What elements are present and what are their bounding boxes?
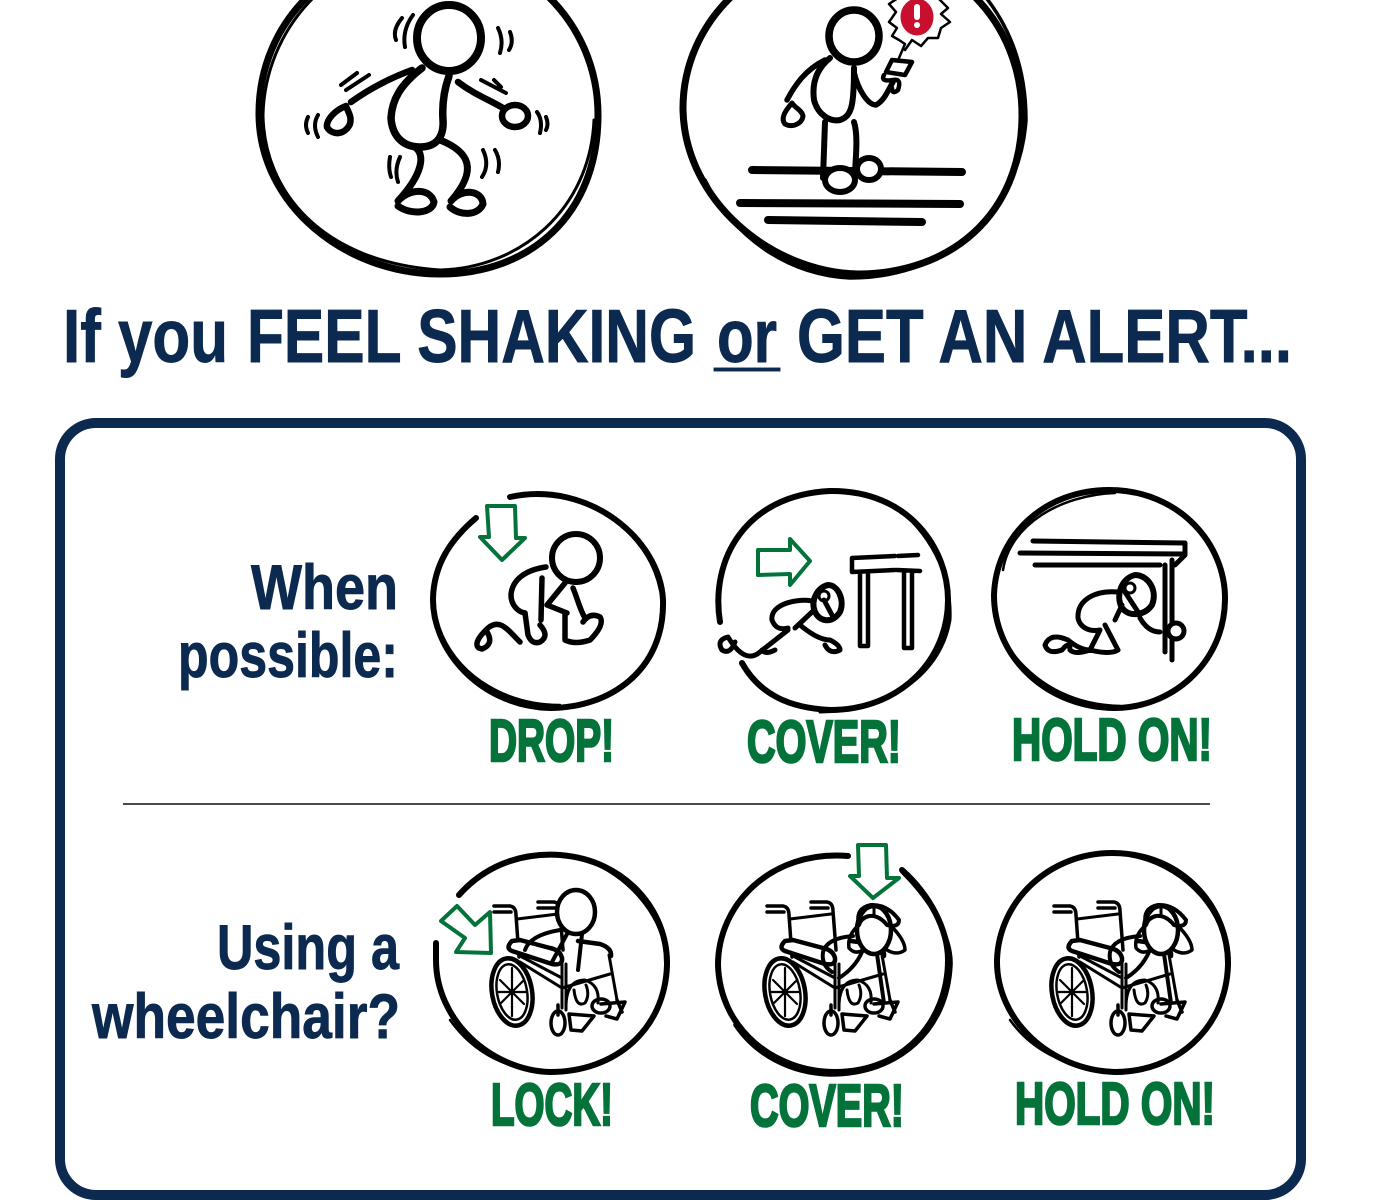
title: or	[717, 294, 777, 378]
motion lines	[306, 15, 548, 182]
label: hold on: HOLD ON!	[1015, 1071, 1215, 1137]
table leg	[1165, 560, 1172, 660]
table	[852, 555, 920, 648]
hands	[327, 106, 351, 133]
arrow diagonal	[441, 906, 491, 953]
wheelchair	[1046, 902, 1185, 1035]
icon: figure receiving phone alert in circle	[683, 0, 1026, 278]
circle outline	[683, 0, 1022, 274]
label: hold on: HOLD ON!	[1012, 707, 1212, 773]
hands and feet	[477, 613, 601, 649]
title: GET AN ALERT...	[797, 294, 1292, 378]
crouching figure	[1119, 575, 1154, 614]
arrow down	[850, 845, 899, 898]
circle outline	[997, 853, 1228, 1072]
heading: using a wheelchair: Using a	[217, 913, 400, 983]
seated figure	[525, 890, 595, 970]
circle outline	[259, 0, 598, 274]
body and limbs	[511, 567, 585, 620]
arms	[787, 60, 893, 105]
icon: hold on	[994, 490, 1225, 708]
icon: cover	[718, 491, 950, 712]
heading: when possible: possible:	[178, 621, 398, 691]
circle outline with gap	[436, 855, 667, 1072]
icon: drop	[433, 494, 663, 708]
head	[829, 10, 879, 62]
wheelchair	[486, 902, 625, 1035]
body	[391, 68, 449, 147]
icon: lock	[436, 855, 667, 1072]
label: cover: COVER!	[750, 1073, 904, 1139]
table	[1020, 541, 1185, 565]
label: drop: DROP!	[489, 708, 614, 774]
arrow down	[480, 506, 525, 560]
alert burst	[889, 0, 950, 58]
icon: cover in wheelchair	[718, 845, 951, 1075]
title: FEEL SHAKING	[247, 294, 696, 378]
label: lock: LOCK!	[491, 1072, 613, 1138]
panel: instructions	[60, 423, 1301, 1195]
circle outline with gap	[433, 494, 663, 708]
heading: using a wheelchair	[91, 913, 400, 1052]
figure covering head	[823, 905, 905, 1003]
title: If you	[63, 294, 228, 378]
body and legs	[813, 58, 856, 178]
title	[63, 294, 1292, 378]
circle outline with gap	[718, 856, 948, 1072]
legs and feet	[398, 140, 483, 213]
circle outline with gap	[718, 491, 948, 710]
head	[552, 534, 600, 582]
circle outline	[994, 490, 1225, 708]
wheelchair	[759, 902, 898, 1035]
heading: when possible: When	[251, 553, 398, 623]
floor lines	[740, 170, 962, 222]
arms	[351, 70, 503, 108]
left hand	[783, 103, 803, 126]
label: cover: COVER!	[747, 709, 901, 775]
exclamation mark	[914, 4, 920, 20]
heading: when possible	[178, 553, 398, 691]
icon: hold on in wheelchair	[997, 853, 1228, 1072]
arrow right	[758, 539, 810, 585]
crawling figure	[813, 585, 842, 620]
head	[417, 5, 481, 71]
heading: using a wheelchair: wheelchair?	[91, 982, 400, 1052]
red alert circle	[901, 0, 933, 35]
feet	[825, 168, 855, 192]
figure covering head	[1110, 905, 1192, 1003]
phone and hand	[883, 60, 912, 92]
icon: shaking figure in circle	[259, 0, 598, 274]
hand on leg	[1168, 623, 1184, 639]
